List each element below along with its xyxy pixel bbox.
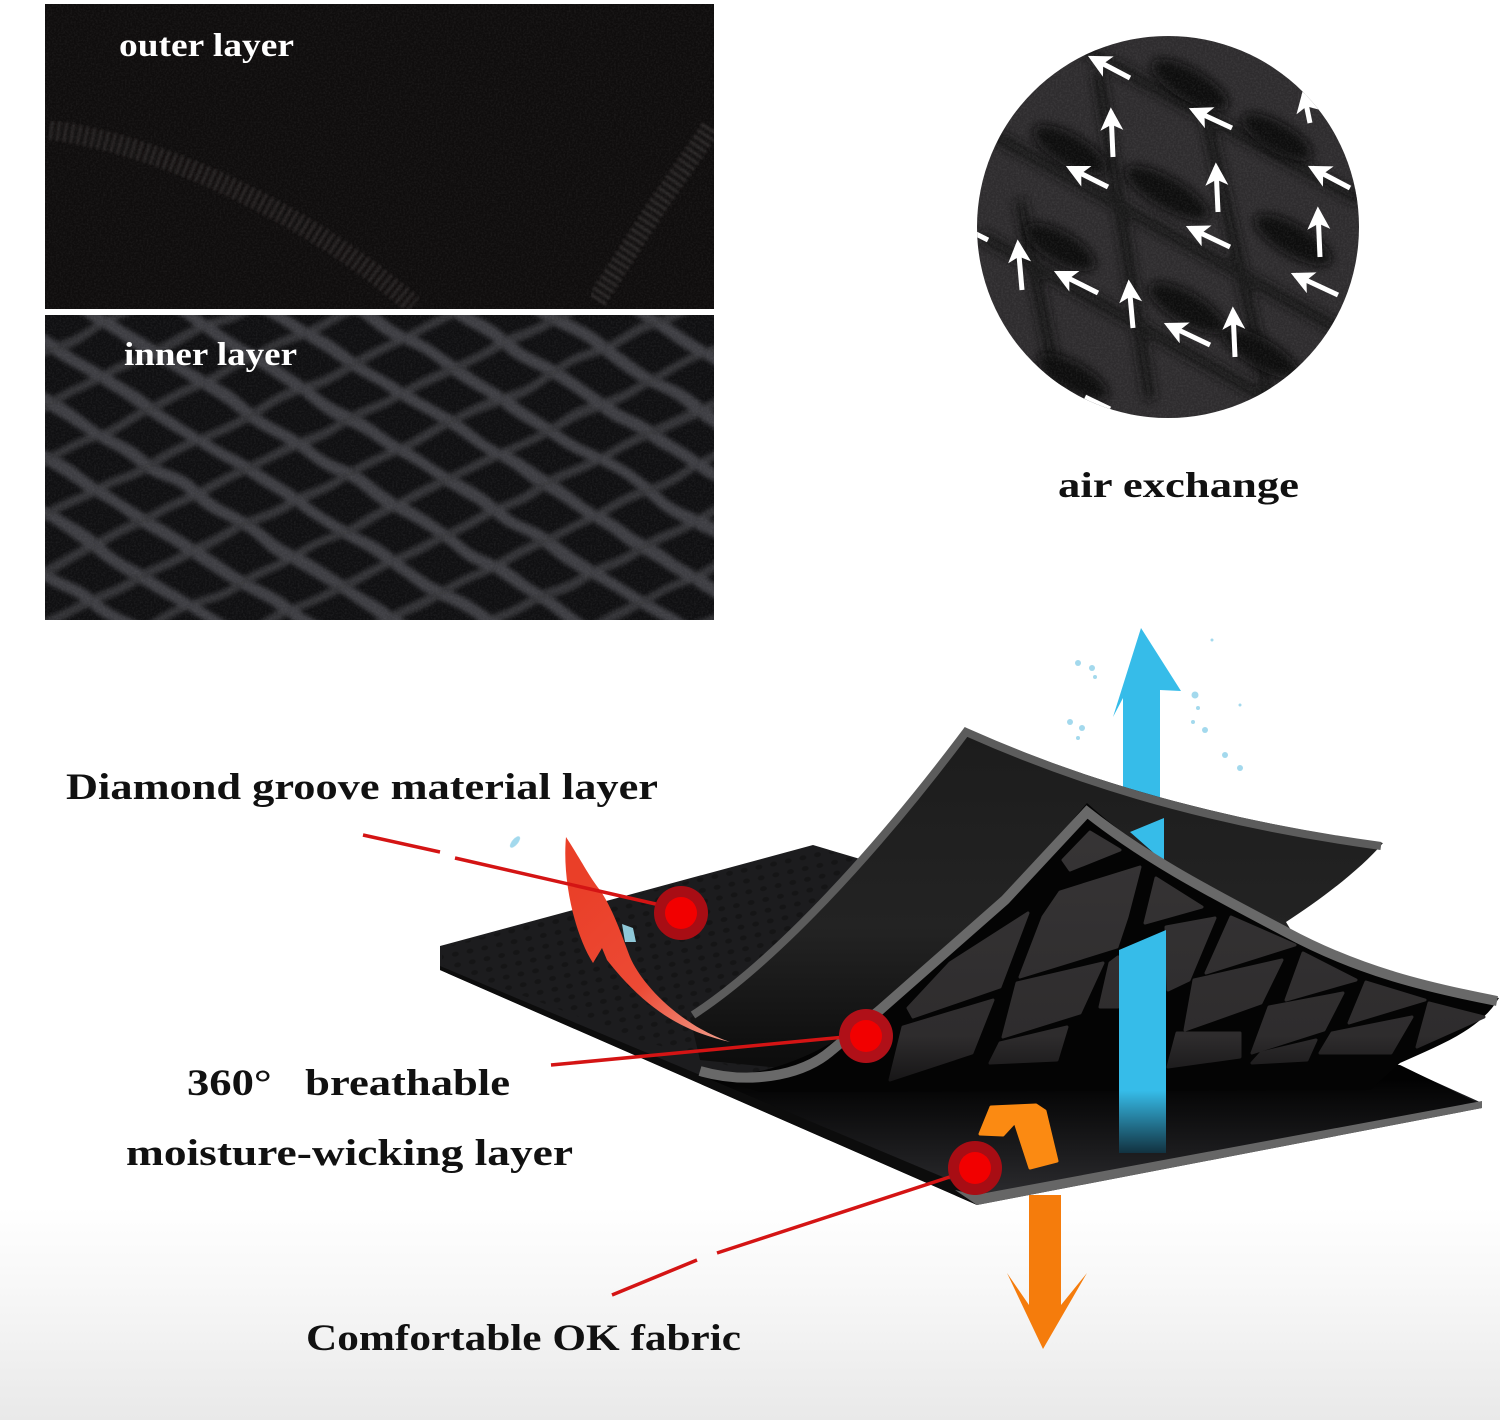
panel: inner layer [45,315,714,620]
illustration: layered fabric [363,628,1499,1349]
layer: top curved flap [690,728,1383,1070]
label: outer layer: outer layer [119,28,294,64]
label: comfortable OK fabric: Comfortable OK fabric [306,1318,741,1359]
icon: water droplets [508,638,1243,849]
leader line and marker: diamond groove layer [363,835,708,940]
panel: air exchange circle [976,36,1360,418]
leader line and marker: breathable layer [551,1009,893,1065]
diamond panels [890,832,1484,1080]
layer: middle grooved flap [700,803,1499,1092]
arrow: orange downward arrow [1007,1195,1087,1349]
label: 360 breathable: 360° breathable [187,1063,510,1104]
arrow: blue arrow, lower section [1119,930,1166,1153]
arrow: orange hook [980,1105,1057,1168]
arrow: blue upward arrow, top section [1113,628,1181,812]
heading: air exchange: air exchange [1058,465,1299,505]
label: inner layer: inner layer [124,337,297,373]
leader line and marker: comfortable fabric [612,1141,1002,1295]
icon: white air-flow arrows [976,58,1350,409]
icon: droplet by red arrow [622,924,636,942]
arrow: blue arrow, visible between flaps [1130,818,1164,862]
label: diamond groove material layer: Diamond groove material layer [66,767,658,808]
layer: bottom diamond-textured sheet [440,845,1482,1205]
label: moisture-wicking layer: moisture-wicking layer [126,1133,573,1174]
arrow: red curved arrow [565,837,730,1042]
panel: outer layer [45,4,714,309]
